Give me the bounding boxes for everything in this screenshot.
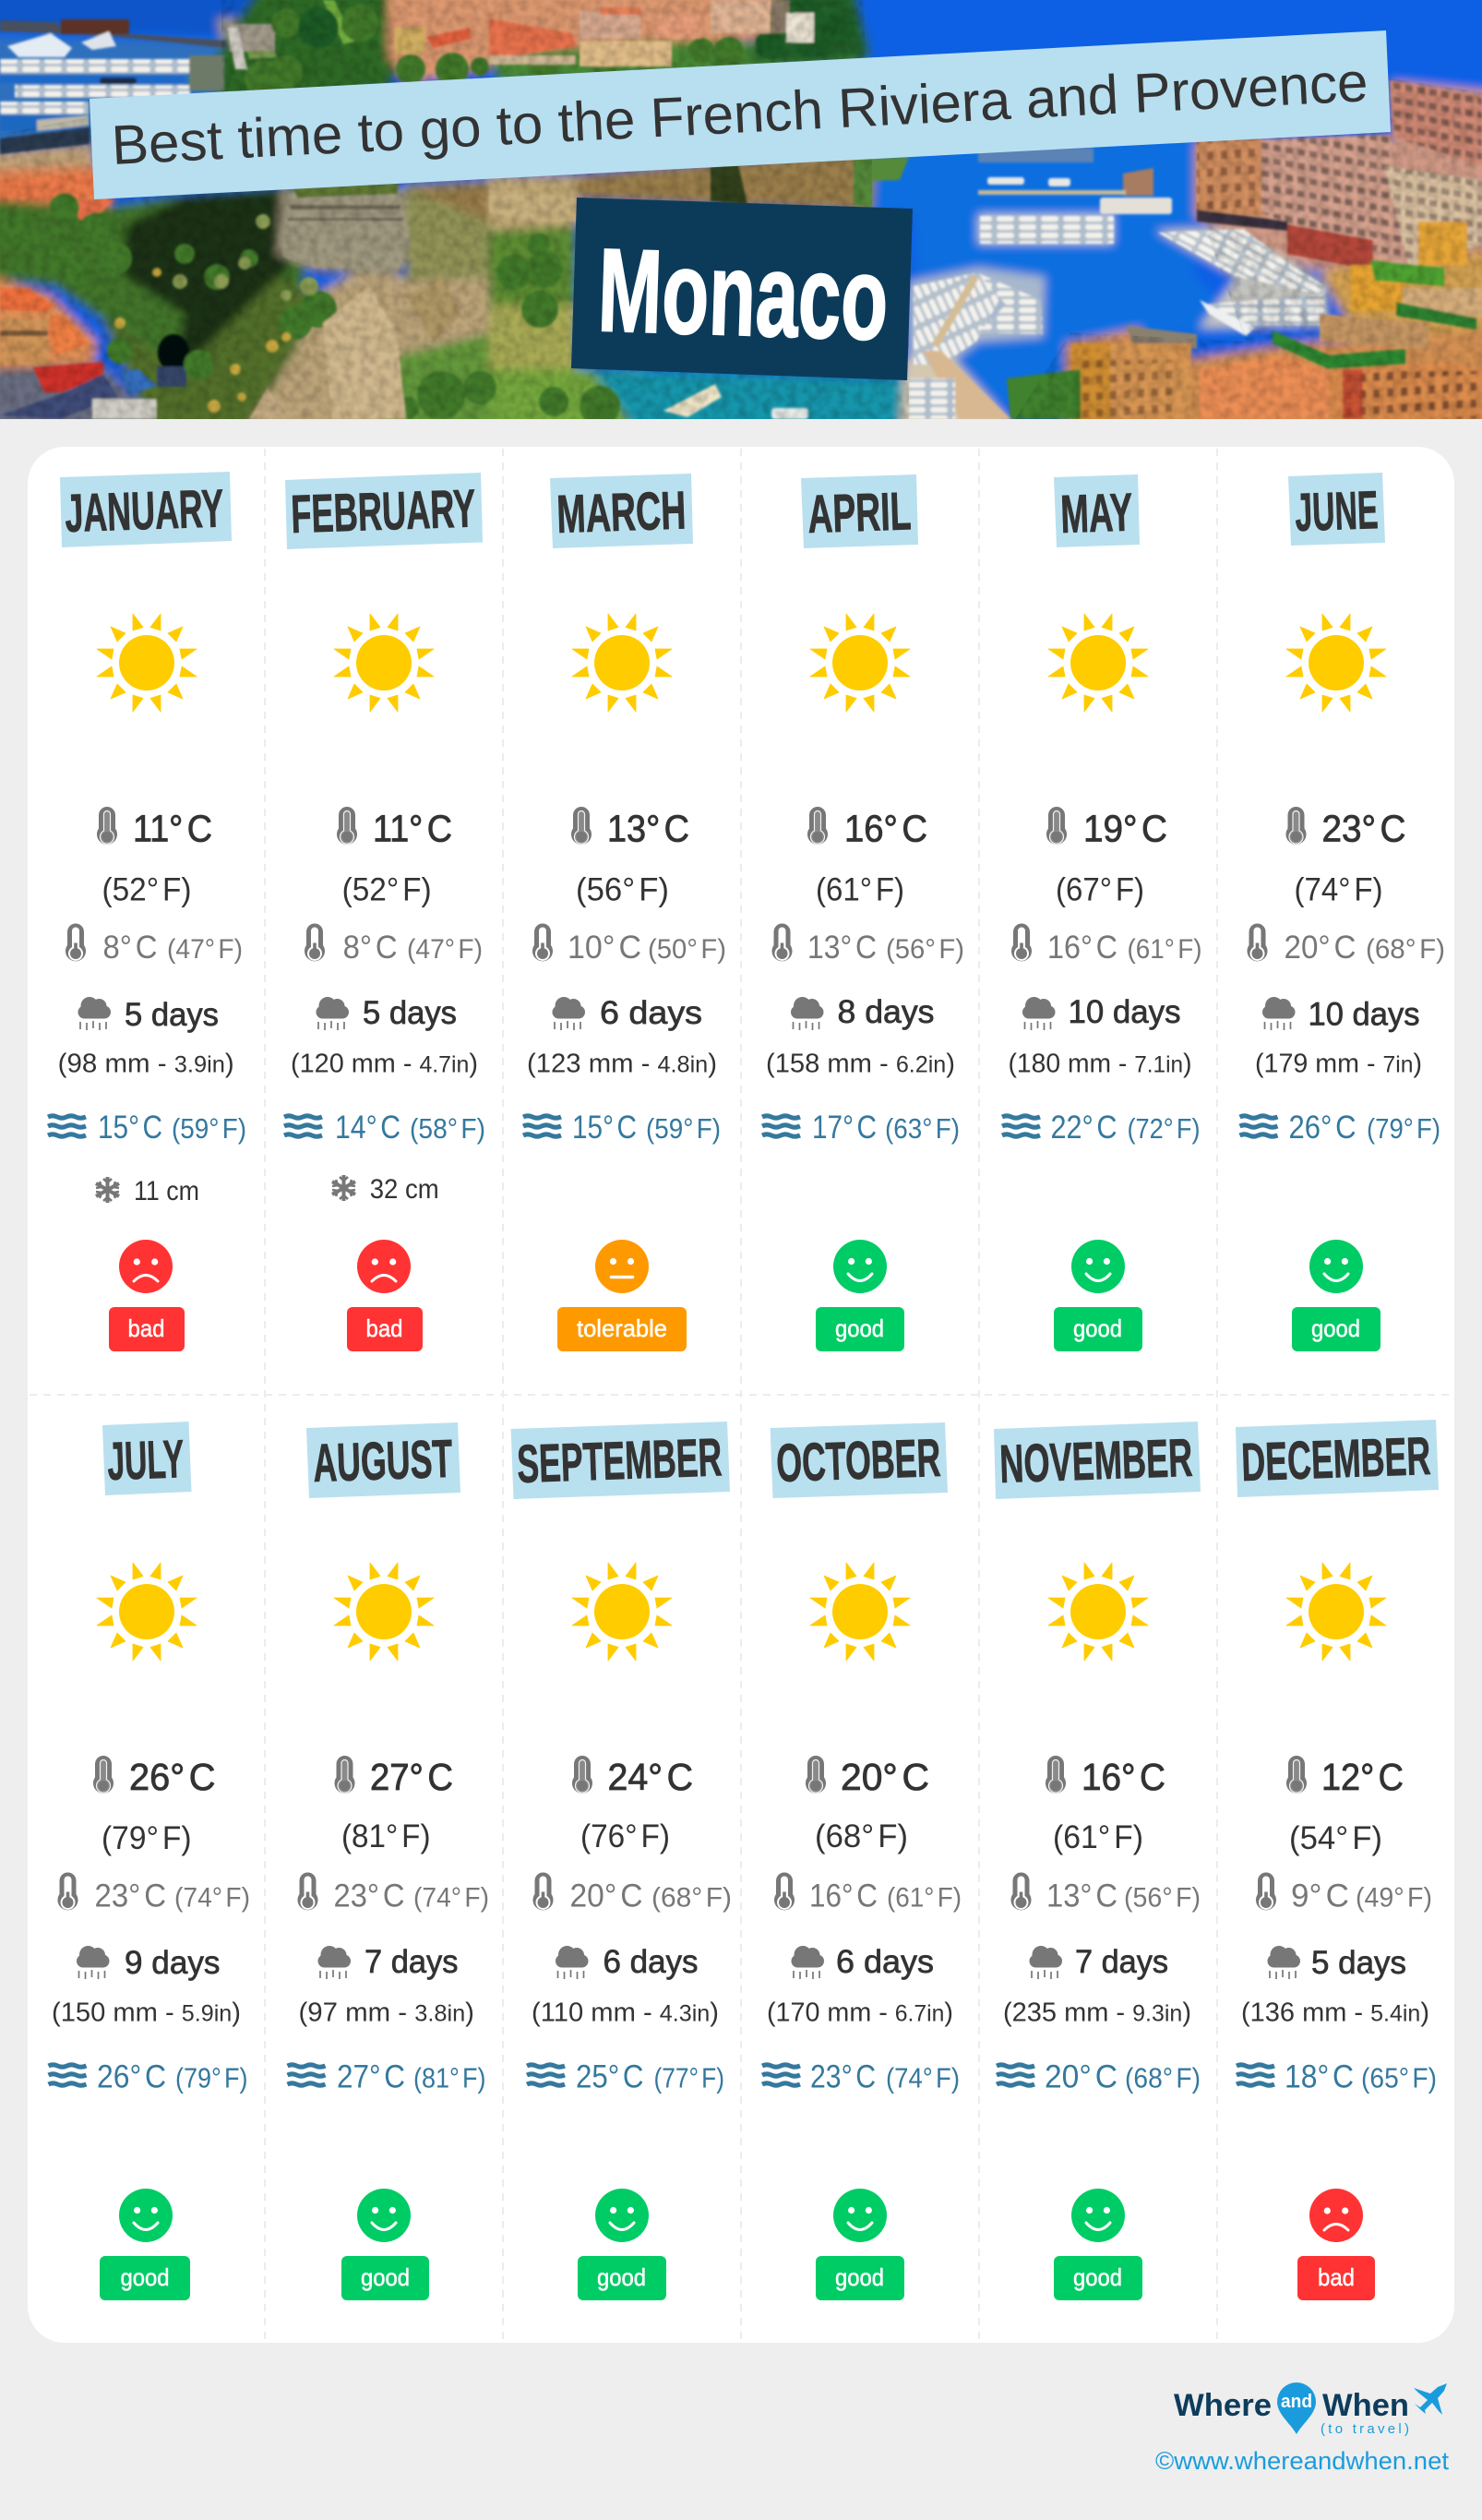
sea temperature: 23° C <box>810 2058 876 2095</box>
palace <box>395 28 424 54</box>
sea temperature F: (77° F) <box>653 2062 724 2094</box>
icon: rain cloud <box>77 1946 109 1979</box>
icon: low thermometer <box>1256 1872 1276 1910</box>
badge: good <box>1054 2256 1142 2300</box>
badge: good: good <box>120 2263 170 2291</box>
sea temperature: 17° C <box>812 1110 877 1146</box>
badge: tolerable <box>557 1307 687 1351</box>
icon: sun <box>97 1563 197 1661</box>
face: good <box>833 1240 887 1293</box>
low temperature F: (47° F) <box>167 934 243 965</box>
face: bad <box>357 1240 411 1293</box>
month: February <box>284 473 485 1351</box>
low temperature F: (74° F) <box>174 1883 250 1913</box>
logo word: When: When <box>1322 2388 1409 2423</box>
sea temperature F: (72° F) <box>1128 1112 1200 1145</box>
icon: sun <box>1286 614 1386 712</box>
month: July <box>48 1422 250 2300</box>
icon: airplane <box>1414 2383 1447 2415</box>
sea temperature F: (65° F) <box>1361 2062 1437 2094</box>
high temperature F: (52° F) <box>342 871 432 908</box>
low temperature: 16° C <box>1047 930 1117 966</box>
month: January <box>48 472 246 1351</box>
icon: sun <box>1048 1563 1148 1661</box>
precipitation: (123 mm - 4.8in) <box>527 1050 717 1079</box>
top green slope <box>323 0 355 44</box>
logo tagline: (to travel) <box>1321 2421 1409 2437</box>
month: October <box>762 1422 962 2300</box>
badge: good <box>341 2256 429 2300</box>
sea temperature: 15° C <box>98 1110 162 1146</box>
high temperature F: (67° F) <box>1056 871 1144 908</box>
month: May <box>1002 474 1201 1351</box>
icon: low thermometer <box>1011 923 1032 961</box>
icon: sea waves <box>762 1116 800 1136</box>
logo word: and: and <box>1281 2392 1312 2412</box>
month: April <box>762 474 964 1351</box>
badge: bad: bad <box>1318 2263 1355 2291</box>
face: bad <box>119 1240 173 1293</box>
high temperature F: (61° F) <box>816 871 904 908</box>
face: good <box>1071 1240 1125 1293</box>
snow depth: 11 cm <box>134 1176 199 1206</box>
rainy days: 9 days <box>125 1945 220 1981</box>
rainy days: 7 days <box>365 1944 458 1980</box>
icon: thermometer <box>572 1756 592 1794</box>
high temperature: 16° C <box>844 807 927 849</box>
destination label: Monaco: Monaco <box>596 224 890 366</box>
icon: sun <box>1286 1563 1386 1661</box>
badge: good <box>816 2256 904 2300</box>
sea temperature F: (58° F) <box>410 1112 485 1145</box>
texture <box>0 0 1482 419</box>
badge: good: good <box>1073 2263 1122 2291</box>
low temperature F: (56° F) <box>1124 1883 1201 1913</box>
high temperature: 23° C <box>1321 807 1406 849</box>
panel: monthly calendar card <box>28 447 1454 2343</box>
icon: low thermometer <box>771 923 792 961</box>
precipitation: (235 mm - 9.3in) <box>1003 1998 1191 2027</box>
icon: low thermometer <box>533 1872 554 1910</box>
high temperature: 12° C <box>1321 1756 1404 1798</box>
precipitation: (120 mm - 4.7in) <box>291 1050 478 1079</box>
sea temperature: 26° C <box>1288 1110 1357 1146</box>
low temperature: 23° C <box>94 1878 166 1914</box>
icon: low thermometer <box>297 1872 317 1910</box>
left bottom buildings <box>0 288 54 312</box>
precipitation: (179 mm - 7in) <box>1255 1050 1422 1079</box>
month label <box>285 473 483 549</box>
badge: good <box>100 2256 190 2300</box>
month: September <box>511 1422 732 2300</box>
rainy days: 8 days <box>838 994 934 1030</box>
low temperature: 13° C <box>807 930 877 966</box>
badge: good: good <box>361 2263 410 2291</box>
high temperature F: (54° F) <box>1289 1820 1382 1856</box>
icon: sun <box>572 1563 672 1661</box>
precipitation: (158 mm - 6.2in) <box>766 1050 955 1079</box>
icon: low thermometer <box>774 1872 795 1910</box>
month label <box>511 1422 730 1499</box>
icon: sea waves <box>1002 1116 1040 1136</box>
logo word: Where: Where <box>1174 2388 1272 2423</box>
icon: rain cloud <box>552 997 585 1030</box>
icon: sea waves <box>523 1116 561 1136</box>
icon: sea waves <box>48 1116 86 1136</box>
sea temperature F: (59° F) <box>172 1112 246 1145</box>
icon: sun <box>1048 614 1148 712</box>
icon: thermometer <box>571 807 592 845</box>
low temperature: 23° C <box>334 1878 404 1914</box>
icon: sea waves <box>1240 1116 1277 1136</box>
month label: FEBRUARY <box>290 478 476 545</box>
sea temperature: 18° C <box>1285 2058 1354 2095</box>
face: tolerable <box>595 1240 649 1293</box>
month label: JANUARY <box>64 478 224 544</box>
tree blobs <box>2 5 744 426</box>
sea temperature F: (74° F) <box>886 2062 960 2094</box>
icon: rain cloud <box>1030 1946 1062 1979</box>
precipitation: (150 mm - 5.9in) <box>52 1998 241 2027</box>
icon: snowflake <box>96 1177 119 1203</box>
icon: rain cloud <box>1262 997 1296 1030</box>
face: good <box>357 2189 411 2242</box>
month label: MAY <box>1059 482 1133 545</box>
high temperature F: (68° F) <box>815 1818 908 1854</box>
month label: MARCH <box>556 480 687 545</box>
badge: tolerable: tolerable <box>577 1314 667 1342</box>
icon: sea waves <box>288 2065 325 2085</box>
month label: OCTOBER <box>775 1428 941 1494</box>
high temperature F: (79° F) <box>102 1820 192 1856</box>
icon: sun <box>810 1563 910 1661</box>
month: June <box>1240 473 1445 1351</box>
low temperature: 13° C <box>1046 1878 1117 1914</box>
destination label: Monaco <box>571 198 913 380</box>
icon: rain cloud <box>1268 1946 1300 1979</box>
low temperature F: (56° F) <box>886 934 964 965</box>
badge: bad <box>1297 2256 1375 2300</box>
rainy days: 5 days <box>363 995 457 1031</box>
right buildings <box>1197 138 1261 215</box>
badge: good <box>1054 1307 1142 1351</box>
low temperature F: (50° F) <box>648 934 726 965</box>
icon: thermometer <box>1046 807 1067 845</box>
high temperature F: (76° F) <box>580 1818 670 1854</box>
logo: Where and When <box>1174 2382 1447 2437</box>
high temperature: 20° C <box>841 1756 929 1798</box>
icon: sea waves <box>284 1116 322 1136</box>
high temperature F: (61° F) <box>1053 1819 1143 1855</box>
icon: thermometer <box>93 1756 114 1794</box>
cliff <box>711 164 747 205</box>
precipitation: (110 mm - 4.3in) <box>532 1998 719 2027</box>
badge: bad <box>109 1307 185 1351</box>
month: August <box>288 1422 489 2300</box>
sea temperature F: (79° F) <box>175 2062 247 2094</box>
icon: thermometer <box>1286 807 1307 845</box>
low temperature: 8° C <box>103 930 157 966</box>
face: good <box>119 2189 173 2242</box>
low temperature F: (68° F) <box>1366 934 1445 965</box>
icon: map pin <box>1277 2382 1316 2434</box>
icon: rain cloud <box>316 997 349 1030</box>
icon: sea waves <box>48 2065 87 2085</box>
badge: good <box>1292 1307 1380 1351</box>
sea temperature: 15° C <box>572 1110 637 1146</box>
badge: bad <box>347 1307 423 1351</box>
sea temperature: 14° C <box>335 1110 400 1146</box>
month label <box>306 1422 460 1498</box>
month: December <box>1236 1420 1439 2300</box>
face: good <box>833 2189 887 2242</box>
precipitation: (180 mm - 7.1in) <box>1008 1050 1192 1079</box>
month label: NOVEMBER <box>998 1428 1193 1494</box>
low temperature F: (68° F) <box>651 1883 732 1913</box>
icon: low thermometer <box>305 923 325 961</box>
high temperature: 13° C <box>607 807 689 849</box>
low temperature: 20° C <box>570 1878 642 1914</box>
month label <box>801 474 918 548</box>
rainy days: 10 days <box>1309 997 1419 1032</box>
rainy days: 7 days <box>1075 1944 1168 1980</box>
icon: sea waves <box>1237 2065 1274 2085</box>
sea temperature: 25° C <box>576 2058 644 2095</box>
badge: bad: bad <box>127 1314 164 1342</box>
face: good <box>1309 1240 1363 1293</box>
icon: snowflake <box>332 1175 355 1201</box>
icon: sun <box>572 614 672 712</box>
badge: good: good <box>1073 1314 1122 1342</box>
icon: sea waves <box>527 2065 565 2085</box>
high temperature F: (52° F) <box>102 871 192 908</box>
month label: AUGUST <box>312 1429 453 1494</box>
low temperature: 20° C <box>1285 930 1357 966</box>
face: good <box>595 2189 649 2242</box>
month label: JULY <box>106 1429 185 1492</box>
icon: rain cloud <box>792 1946 824 1979</box>
icon: rain cloud <box>556 1946 589 1979</box>
icon: sun <box>97 614 197 712</box>
month label: SEPTEMBER <box>516 1427 723 1494</box>
icon: sun <box>334 1563 434 1661</box>
port details <box>914 273 1006 365</box>
icon: low thermometer <box>1248 923 1268 961</box>
high temperature: 27° C <box>370 1756 453 1798</box>
month label <box>771 1422 948 1498</box>
month: November <box>994 1422 1201 2300</box>
badge: good: good <box>835 1314 884 1342</box>
sea temperature F: (59° F) <box>646 1112 721 1145</box>
rainy days: 6 days <box>600 995 702 1031</box>
icon: rain cloud <box>78 997 111 1030</box>
tower <box>282 189 411 270</box>
low temperature F: (47° F) <box>407 934 483 965</box>
icon: thermometer <box>97 807 117 845</box>
icon: thermometer <box>334 1756 354 1794</box>
month label <box>550 474 693 548</box>
high temperature: 11° C <box>373 807 452 849</box>
icon: thermometer <box>1046 1756 1066 1794</box>
icon: rain cloud <box>791 997 823 1030</box>
month: March <box>523 474 726 1351</box>
low temperature: 9° C <box>1291 1878 1349 1914</box>
icon: sea waves <box>762 2065 800 2085</box>
month label: APRIL <box>807 481 912 545</box>
icon: sea waves <box>997 2065 1034 2085</box>
badge: good: good <box>1311 1314 1360 1342</box>
snow depth: 32 cm <box>370 1174 439 1205</box>
badge: good <box>578 2256 666 2300</box>
title banner: Best time to go to the French Riviera and Provence <box>110 51 1369 176</box>
sea temperature: 22° C <box>1050 1110 1117 1146</box>
low temperature F: (74° F) <box>413 1883 489 1913</box>
precipitation: (98 mm - 3.9in) <box>58 1050 234 1079</box>
rainy days: 10 days <box>1069 994 1181 1030</box>
copyright url: ©www.whereandwhen.net <box>1155 2447 1449 2475</box>
icon: sun <box>810 614 910 712</box>
icon: rain cloud <box>1022 997 1056 1030</box>
sea temperature F: (68° F) <box>1125 2062 1201 2094</box>
badge: good: good <box>835 2263 884 2291</box>
badge: good <box>816 1307 904 1351</box>
high temperature: 24° C <box>607 1756 693 1798</box>
month label <box>994 1422 1201 1499</box>
low temperature: 8° C <box>343 930 398 966</box>
month label: JUNE <box>1294 480 1379 543</box>
rainy days: 5 days <box>1311 1945 1406 1981</box>
sea temperature F: (63° F) <box>885 1112 960 1145</box>
high temperature: 19° C <box>1083 807 1167 849</box>
grid dividers <box>30 449 1452 2341</box>
icon: thermometer <box>806 1756 826 1794</box>
icon: sun <box>334 614 434 712</box>
month label <box>60 472 232 547</box>
precipitation: (97 mm - 3.8in) <box>299 1998 474 2027</box>
low temperature F: (49° F) <box>1356 1883 1432 1913</box>
sea temperature F: (79° F) <box>1367 1112 1440 1145</box>
low temperature: 10° C <box>568 930 641 966</box>
month label <box>102 1422 192 1495</box>
rainy days: 6 days <box>836 1944 934 1980</box>
left harbour details <box>0 20 226 48</box>
icon: low thermometer <box>532 923 553 961</box>
low temperature: 16° C <box>809 1878 878 1914</box>
face: good <box>1071 2189 1125 2242</box>
high temperature F: (74° F) <box>1294 871 1382 908</box>
precipitation: (136 mm - 5.4in) <box>1241 1998 1429 2027</box>
header photo: Monaco harbour aerial <box>0 0 1482 419</box>
sea temperature F: (81° F) <box>413 2062 485 2094</box>
sea temperature: 26° C <box>97 2058 166 2095</box>
icon: thermometer <box>337 807 357 845</box>
sea temperature: 27° C <box>337 2058 405 2095</box>
sea temperature: 20° C <box>1045 2058 1117 2095</box>
icon: thermometer <box>807 807 828 845</box>
high temperature: 11° C <box>133 807 212 849</box>
high temperature: 26° C <box>129 1756 216 1798</box>
icon: low thermometer <box>66 923 86 961</box>
badge: good: good <box>597 2263 646 2291</box>
low temperature F: (61° F) <box>1128 934 1201 965</box>
precipitation: (170 mm - 6.7in) <box>767 1998 953 2027</box>
rainy days: 5 days <box>125 997 219 1033</box>
icon: low thermometer <box>1011 1872 1032 1910</box>
rock highlights <box>323 286 406 419</box>
face: bad <box>1309 2189 1363 2242</box>
icon: thermometer <box>1286 1756 1307 1794</box>
icon: low thermometer <box>57 1872 78 1910</box>
low temperature F: (61° F) <box>887 1883 962 1913</box>
badge: bad: bad <box>365 1314 402 1342</box>
high temperature F: (56° F) <box>576 871 669 908</box>
high temperature: 16° C <box>1082 1756 1165 1798</box>
month label <box>1054 474 1140 547</box>
rainy days: 6 days <box>604 1944 698 1980</box>
high temperature F: (81° F) <box>341 1818 430 1854</box>
month label <box>1288 473 1385 546</box>
icon: rain cloud <box>317 1946 351 1979</box>
